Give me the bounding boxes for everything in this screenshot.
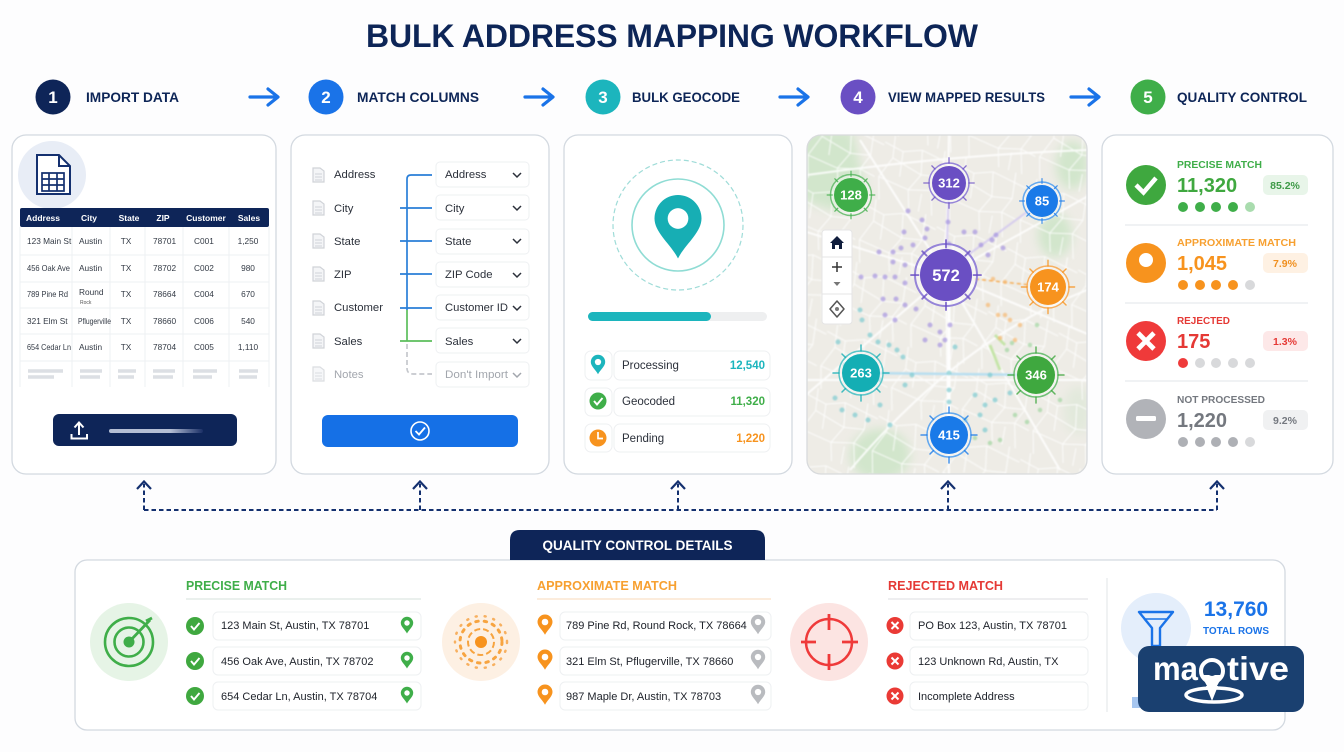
total rows summary [1121,593,1269,708]
arrow 2 to 3 [525,89,553,105]
step 1: import data: 1 [48,88,58,107]
cluster: 128 [827,171,875,219]
step 3: bulk geocode [586,80,740,114]
result: rejected [1126,316,1308,368]
list: precise match: PRECISE MATCH [186,579,287,593]
icon: target [90,603,168,681]
source fields: ZIP [334,269,352,281]
scattered location dots: teal and blue [835,310,1010,430]
data table: 980 [241,263,255,273]
source fields [313,168,383,381]
result: not processed [1126,395,1308,447]
data table: TX [121,263,132,273]
list: rejected match [886,579,1088,710]
data table: Customer [186,213,227,223]
data table: 540 [241,316,255,326]
data table: State [119,213,140,223]
data table: TX [121,236,132,246]
status row: pending: 1,220 [736,433,765,445]
icon: approximate radar [442,603,520,681]
icon: spreadsheet document [18,141,86,209]
connector lines [400,175,432,374]
list: precise match: 123 Main St, Austin, TX 78701 [221,620,369,632]
result: approximate match: APPROXIMATE MATCH [1177,238,1296,249]
data table: Round [79,287,104,297]
data table: 1,250 [238,236,259,246]
data table: 78701 [153,236,176,246]
data table: Rock [80,300,92,306]
status row: processing [585,351,770,380]
cluster: 174 [1021,260,1075,314]
list: rejected match: 123 Unknown Rd, Austin, TX [918,656,1059,668]
data table: C006 [194,316,214,326]
result: precise match: 11,320 [1177,175,1237,197]
cluster: 415: 415 [938,428,960,442]
target field dropdowns: Customer ID [445,302,508,314]
major roads [800,130,1090,480]
panel: quality control details [75,530,1285,730]
step 3: bulk geocode: 3 [598,88,608,107]
details tab heading [510,530,765,560]
data table [20,208,269,387]
cluster: 263 [833,345,889,401]
data table: 78702 [153,263,176,273]
list: rejected match: PO Box 123, Austin, TX 78701 [918,620,1067,632]
icon: rejected crosshair [790,603,868,681]
result: rejected: REJECTED [1177,316,1230,327]
confirm button [322,415,518,447]
data table: C004 [194,289,214,299]
cluster: 346: 346 [1025,368,1047,382]
cluster: 312: 312 [938,176,960,190]
source fields: Notes [334,369,364,381]
progress bar [588,312,767,321]
logo: maptive [1138,646,1304,712]
status row: processing: Processing [622,360,679,372]
list: precise match: 456 Oak Ave, Austin, TX 78702 [221,656,373,668]
location rays [946,200,1030,258]
data table: TX [121,289,132,299]
data table: Austin [79,342,102,352]
title: BULK ADDRESS MAPPING WORKFLOW [366,18,979,54]
cluster: 312 [924,158,974,208]
result: approximate match: 1,045 [1177,253,1227,275]
data table: TX [121,342,132,352]
data table: 654 Cedar Ln [27,342,71,352]
list: approximate match [537,579,771,710]
result: not processed: NOT PROCESSED [1177,395,1265,406]
data table: 456 Oak Ave [27,263,70,273]
data table: City [81,213,97,223]
total rows summary: 13,760 [1204,598,1268,621]
panel: quality control [1102,135,1333,474]
arrow 1 to 2 [250,89,278,105]
result: approximate match [1126,238,1308,290]
feedback connector arrows [137,482,1224,510]
list: approximate match: 987 Maple Dr, Austin, TX 78703 [566,691,721,703]
workflow steps header [36,80,1307,114]
data table: Austin [79,236,102,246]
status row: pending: Pending [622,433,664,445]
scattered location dots: orange and green [988,279,1020,340]
list: precise match: 654 Cedar Ln, Austin, TX 78704 [221,691,377,703]
data table: 78704 [153,342,176,352]
data table: 78664 [153,289,176,299]
arrow 3 to 4 [780,89,808,105]
cluster: 263: 263 [850,366,872,380]
step 4: view mapped results: 4 [853,88,863,107]
source fields: State [334,236,360,248]
data table: Pflugerville [78,316,111,326]
cluster: 85 [1020,179,1064,223]
step 5: quality control [1130,80,1307,114]
step 1: import data [36,80,179,114]
data table: 789 Pine Rd [27,289,68,299]
result: approximate match: 7.9% [1273,258,1298,270]
data table: Sales [238,213,260,223]
step 2: match columns [308,80,479,114]
upload button [53,414,237,446]
data table: C002 [194,263,214,273]
source fields: Customer [334,302,383,314]
target field dropdowns: Address [445,169,487,181]
data table: 1,110 [238,342,258,352]
data table: 670 [241,289,255,299]
status row: geocoded [585,388,770,416]
target field dropdowns: Don't Import [445,369,509,381]
data table: 321 Elm St [27,316,68,326]
data table: 78660 [153,316,176,326]
cluster: 346 [1008,347,1064,403]
result: not processed: 9.2% [1273,415,1298,427]
logo: maptive: ma [1153,650,1199,687]
target field dropdowns: Sales [445,336,474,348]
source fields: Sales [334,336,363,348]
target field dropdowns: State [445,236,471,248]
data table: ZIP [156,213,170,223]
cluster: 128: 128 [840,188,862,202]
step 5: quality control: 5 [1143,88,1153,107]
list: approximate match: 789 Pine Rd, Round Rock, TX 78664 [566,620,747,632]
step 3: bulk geocode: BULK GEOCODE [632,90,740,105]
result: not processed: 1,220 [1177,410,1227,432]
data table: 123 Main St [27,236,72,246]
data table: Austin [79,263,102,273]
logo: maptive: tive [1227,650,1289,687]
panel: mapped results map [800,130,1092,481]
cluster: 572 [911,240,981,310]
status row: geocoded: Geocoded [622,396,675,408]
step 5: quality control: QUALITY CONTROL [1177,90,1307,105]
status row: geocoded: 11,320 [730,396,765,408]
step 1: import data: IMPORT DATA [86,90,179,105]
list: rejected match: REJECTED MATCH [888,579,1003,593]
step 2: match columns: MATCH COLUMNS [357,90,479,105]
cluster: 174: 174 [1037,280,1060,294]
step 2: match columns: 2 [321,88,331,107]
target field dropdowns [436,162,529,387]
scattered location dots: purple [861,211,1003,345]
panel: import data [12,135,276,474]
data table: C005 [194,342,214,352]
panel: match columns [291,135,549,474]
result: rejected: 1.3% [1273,336,1298,348]
arrow 4 to 5 [1071,89,1099,105]
icon: geocode pin with rings [613,160,743,290]
status row: processing: 12,540 [730,360,765,372]
cluster: 572: 572 [932,267,960,285]
map controls [822,230,852,324]
list: approximate match: APPROXIMATE MATCH [537,579,677,593]
list: rejected match: Incomplete Address [918,691,1015,703]
cluster: 415 [921,407,977,463]
list: precise match [186,579,421,710]
list: approximate match: 321 Elm St, Pflugerville, TX 78660 [566,656,733,668]
source fields: City [334,203,354,215]
target field dropdowns: City [445,203,465,215]
status row: pending [585,424,770,452]
data table: Address [26,213,60,223]
result: precise match [1126,160,1308,212]
result: rejected: 175 [1177,331,1210,353]
source fields: Address [334,169,376,181]
step 4: view mapped results: VIEW MAPPED RESULTS [888,90,1045,105]
target field dropdowns: ZIP Code [445,269,493,281]
data table: C001 [194,236,214,246]
total rows summary: TOTAL ROWS [1203,626,1269,637]
result: precise match: 85.2% [1270,180,1301,192]
data table: TX [121,316,132,326]
step 4: view mapped results [840,80,1045,114]
result: precise match: PRECISE MATCH [1177,160,1262,171]
details tab heading: QUALITY CONTROL DETAILS [542,538,732,553]
cluster: 85: 85 [1035,194,1049,208]
panel: bulk geocode [564,135,792,474]
